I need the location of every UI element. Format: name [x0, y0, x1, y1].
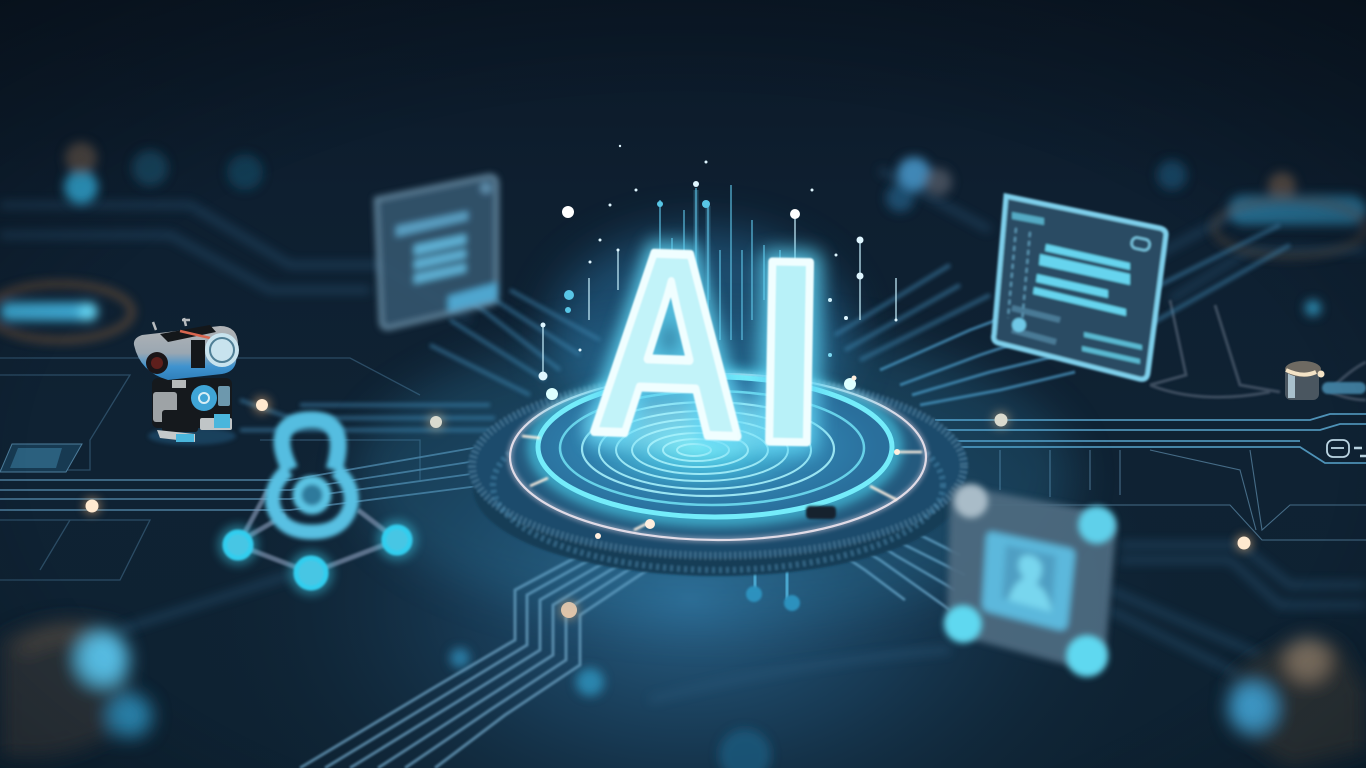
- hologram particles: [538, 145, 898, 380]
- letter A: A: [587, 194, 752, 492]
- brown traces and blurred bundles at right: [1150, 300, 1366, 400]
- card corner lights: [944, 484, 1116, 677]
- amber node lights: [84, 397, 1252, 619]
- four horizontal left traces: [0, 445, 510, 510]
- AI letters: [587, 194, 829, 499]
- traces radiating left, blurred: [240, 290, 600, 430]
- blurred foreground object right: [1228, 638, 1366, 768]
- letter A: A: [587, 194, 752, 492]
- circuit chip left: [0, 444, 82, 472]
- small chip outline right: [1327, 440, 1366, 457]
- traces running down-left from disc: [300, 538, 674, 768]
- disc base platform: [355, 325, 1075, 625]
- metal capacitor: [1285, 361, 1366, 400]
- small chip on disc rim: [806, 506, 836, 519]
- panel: floating screen left: [376, 176, 498, 328]
- icon: floating user card: [947, 486, 1116, 671]
- robot head: [134, 326, 238, 380]
- glowing inner ring with spiral: [535, 375, 895, 519]
- data bars behind AI: [543, 185, 896, 378]
- letter I: I: [751, 204, 829, 499]
- blurred background circuit traces: [0, 170, 1366, 700]
- traces running down-right from disc: [820, 505, 965, 610]
- circuit board thin lines left: [0, 358, 420, 580]
- main right trace bundle: [935, 414, 1366, 463]
- blurred foreground object left: [0, 620, 152, 758]
- letter I: I: [751, 204, 829, 499]
- circuit board thin lines right: [980, 450, 1366, 540]
- disc rim sparks: [522, 376, 922, 539]
- panel: floating screen right: [994, 196, 1166, 379]
- icon: lock network: [218, 420, 417, 595]
- robot body: [152, 378, 232, 442]
- icon: toy robot: [134, 318, 239, 445]
- short stems below disc: [746, 555, 800, 611]
- traces radiating right, blurred: [880, 315, 1075, 405]
